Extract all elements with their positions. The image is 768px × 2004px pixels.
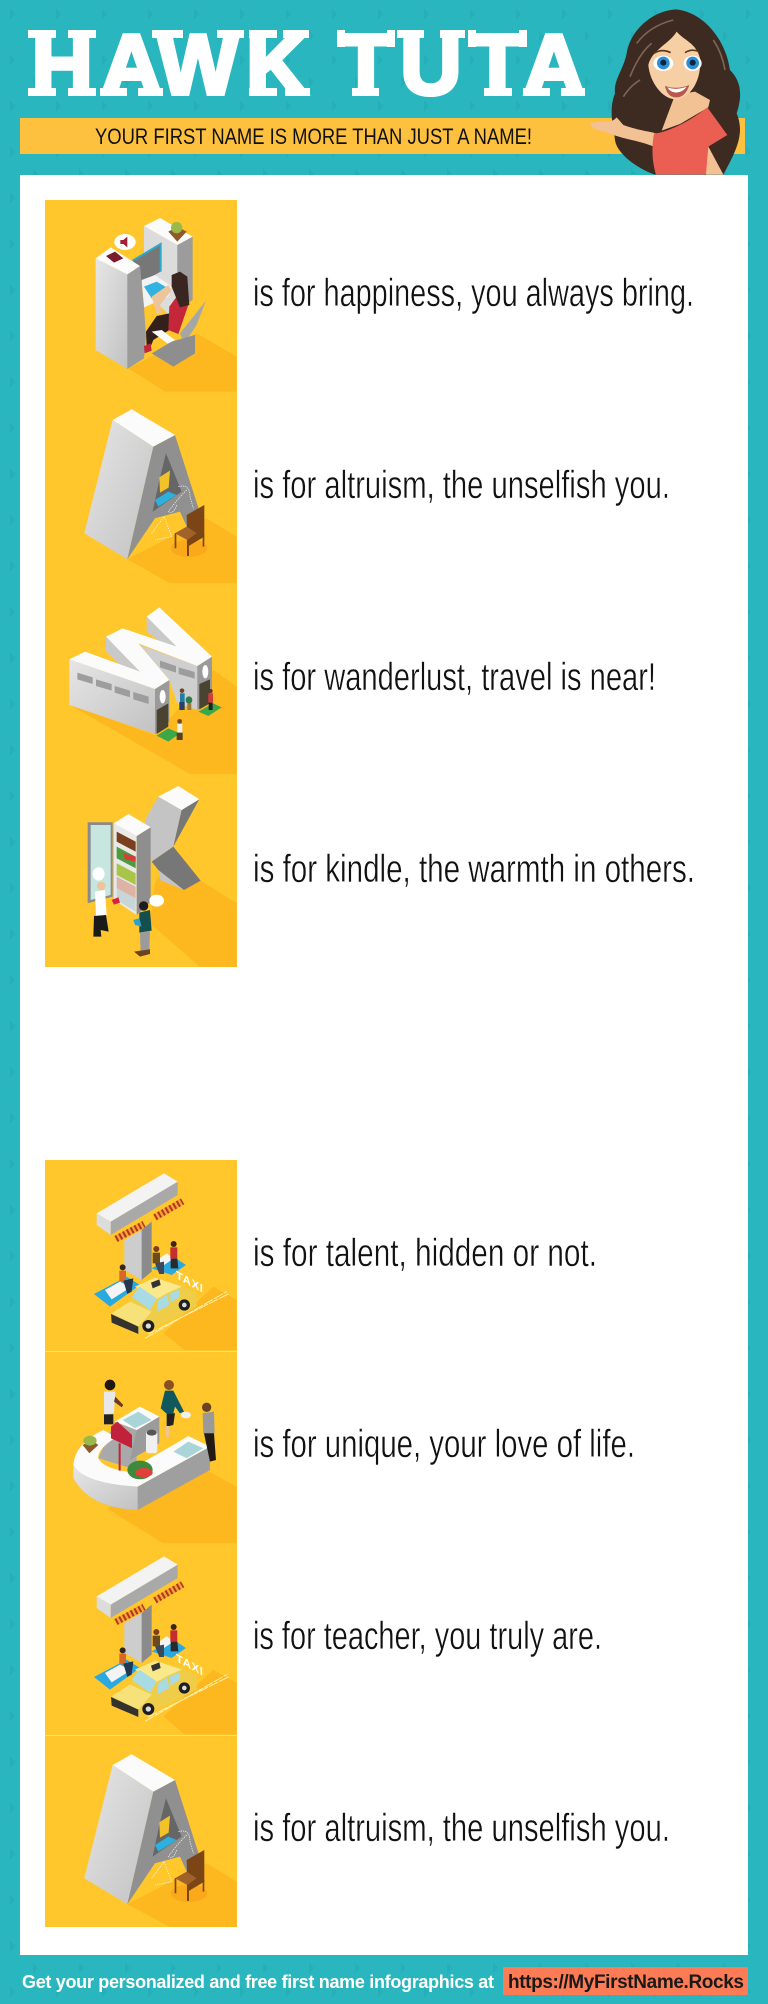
shadow — [163, 1670, 237, 1734]
chair — [175, 1850, 204, 1901]
windows — [77, 661, 195, 704]
chef — [93, 867, 120, 937]
chair shadow — [171, 1885, 207, 1902]
icon: cartoon woman mascot — [590, 9, 740, 175]
U top — [73, 1430, 210, 1487]
desk — [142, 275, 172, 307]
screen and keyboard — [155, 1816, 177, 1852]
blue mats — [94, 1640, 186, 1690]
U walls — [73, 1447, 210, 1510]
taxi — [111, 1278, 197, 1334]
card: letter U illustration — [73, 1380, 237, 1543]
shadow — [163, 1287, 237, 1350]
card: letter W illustration — [69, 607, 237, 774]
dashed figure outline — [152, 486, 193, 540]
kiosk block — [98, 1407, 159, 1470]
subtitle banner: YOUR FIRST NAME IS MORE THAN JUST A NAME! — [95, 124, 532, 149]
menu sign — [111, 1422, 132, 1471]
woman in teal — [161, 1380, 191, 1437]
blue mats — [94, 1257, 186, 1307]
seated people — [119, 1241, 178, 1294]
letter body — [84, 1754, 203, 1904]
shadow — [128, 333, 237, 392]
letter body — [84, 409, 203, 559]
TAXI road text: TAXI — [176, 1651, 204, 1679]
chair — [152, 301, 206, 367]
doors — [157, 665, 210, 734]
road lines — [145, 1675, 228, 1721]
fridge — [88, 814, 151, 915]
letter K — [145, 786, 201, 890]
yellow column: top cards background — [45, 200, 237, 967]
text: U line: is for unique, your love of life. — [253, 1423, 635, 1466]
text: T line: is for talent, hidden or not. — [253, 1232, 597, 1275]
footer link badge: https://MyFirstName.Rocks — [508, 1972, 744, 1993]
striped awnings — [116, 1201, 183, 1239]
card: letter T illustration (first) — [94, 1173, 237, 1350]
chair — [175, 505, 204, 556]
letter bar — [97, 1173, 178, 1235]
shadow — [127, 518, 237, 583]
monitor — [133, 244, 161, 283]
seated woman — [144, 272, 189, 353]
benches — [105, 1253, 174, 1299]
seated people — [119, 1624, 178, 1677]
title: HAWK TUTA — [32, 18, 585, 113]
letter stem — [124, 1222, 152, 1280]
green mats — [157, 703, 222, 742]
shadow — [150, 847, 237, 967]
letter bar — [97, 1556, 178, 1618]
speech bubble: mute — [114, 234, 136, 250]
trash can — [146, 1430, 157, 1453]
TAXI road text: TAXI — [176, 1268, 204, 1296]
card: letter A illustration (second) — [84, 1754, 237, 1927]
man with speech bubble — [133, 895, 164, 957]
footer text: Get your personalized and free first name infographics at — [22, 1972, 494, 1992]
small people — [177, 688, 213, 740]
shadow — [127, 1863, 237, 1927]
text: second T line: is for teacher, you truly are. — [253, 1615, 602, 1658]
yellow column: bottom cards background — [45, 1160, 237, 1927]
card: letter H illustration — [96, 218, 237, 392]
back post — [144, 218, 193, 323]
shadow — [107, 1470, 237, 1543]
front post — [96, 247, 146, 369]
card: letter T illustration (second) — [94, 1556, 237, 1734]
road lines — [145, 1292, 228, 1338]
letter stem — [124, 1605, 152, 1663]
screen and keyboard — [155, 471, 177, 507]
striped awnings — [116, 1584, 183, 1622]
taxi — [111, 1661, 197, 1717]
woman with bun — [104, 1380, 123, 1424]
watermelon — [127, 1461, 153, 1479]
waiter — [202, 1403, 216, 1462]
chair shadow — [171, 540, 207, 557]
subtitle banner — [20, 118, 745, 154]
benches — [105, 1636, 174, 1682]
dashed figure outline — [152, 1831, 193, 1885]
shadow — [70, 670, 237, 774]
card: letter A illustration — [84, 409, 237, 583]
letter body — [69, 607, 212, 734]
card: letter K illustration — [88, 786, 237, 967]
planter — [83, 1436, 98, 1453]
